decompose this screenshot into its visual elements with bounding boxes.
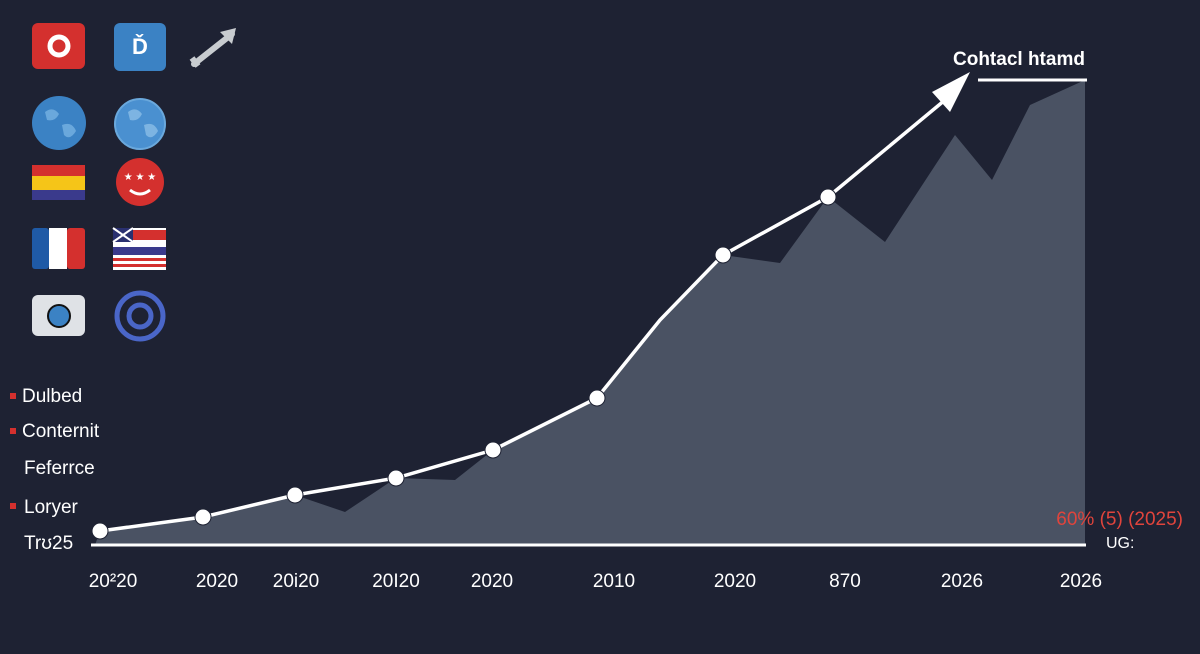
icon: camera button	[32, 295, 85, 336]
trend line with arrow	[92, 72, 970, 539]
area chart	[95, 80, 1085, 545]
x axis labels: 20i20	[273, 571, 319, 592]
legend: Trʊ25	[24, 533, 73, 554]
x axis labels: 2026	[941, 571, 983, 592]
icon: flag tricolor horizontal	[32, 165, 85, 200]
x axis labels: 2026	[1060, 571, 1102, 592]
legend: Feferrce	[24, 458, 95, 479]
baseline	[91, 544, 1086, 546]
x axis labels: 870	[829, 571, 861, 592]
x axis labels: 2020	[714, 571, 756, 592]
icon: arrow	[192, 28, 236, 66]
callout	[1056, 509, 1183, 552]
title	[953, 49, 1087, 80]
icon: ring	[117, 293, 163, 339]
icon: striped flag	[113, 228, 166, 270]
legend: Conternit	[22, 421, 100, 442]
x axis labels: 2010	[593, 571, 635, 592]
legend	[10, 386, 100, 554]
icon: red circle flag: ★ ★ ★	[124, 172, 156, 183]
x axis labels: 20I20	[372, 571, 420, 592]
icon: red circle flag	[116, 158, 164, 206]
x axis labels: 2020	[471, 571, 513, 592]
callout: UG:	[1106, 535, 1134, 552]
icon: blue app: Ď	[132, 34, 148, 59]
x axis labels	[89, 571, 1102, 592]
x axis labels: 2020	[196, 571, 238, 592]
x axis labels: 20²20	[89, 571, 137, 592]
icon: red record	[32, 23, 85, 69]
icon: French flag	[32, 228, 85, 269]
icon: blue app	[114, 23, 166, 71]
callout: 60% (5) (2025)	[1056, 509, 1183, 530]
legend: Loryer	[24, 497, 79, 518]
title: Cohtacl htamd	[953, 49, 1085, 70]
legend: Dulbed	[22, 386, 82, 407]
icon: globe 1	[32, 96, 86, 150]
icon: globe 2	[115, 99, 165, 149]
